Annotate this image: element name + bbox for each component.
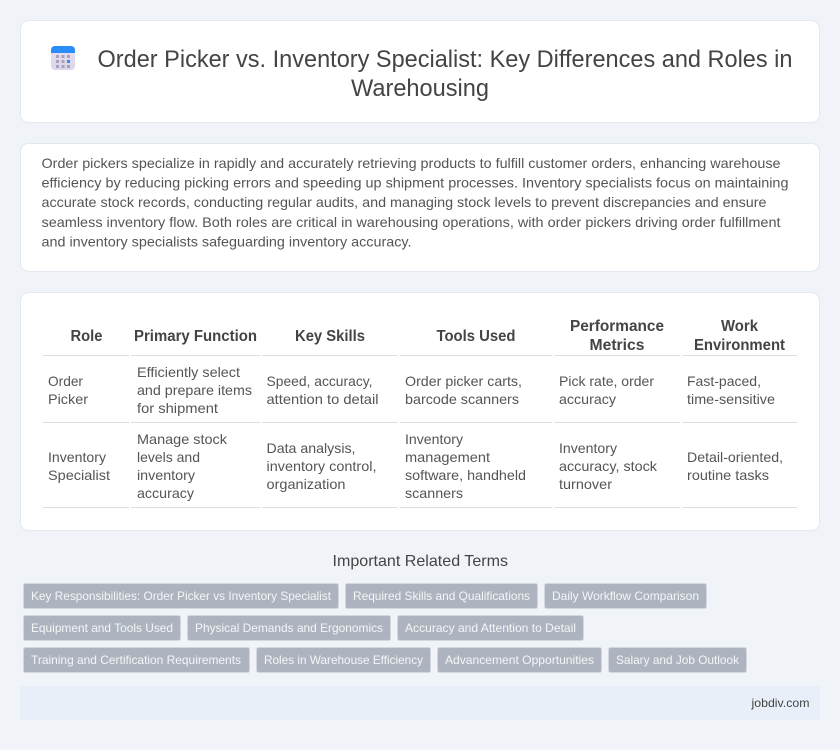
table row: order picker: and prepare items <box>137 382 252 398</box>
tag: Roles in Warehouse Efficiency <box>264 653 423 667</box>
table header row: Environment <box>694 337 786 354</box>
text block: role summary: Order pickers specialize in rapidly and accurately retrieving products to fulfill customer orders, enhancing warehouse <box>42 155 781 171</box>
table row: inventory specialist: Detail-oriented, <box>687 449 783 465</box>
panel: introduction text <box>20 144 820 272</box>
table row: inventory specialist: organization <box>266 476 346 492</box>
table row: inventory specialist: levels and <box>137 449 200 465</box>
table row: inventory specialist: inventory <box>137 467 195 483</box>
table row: inventory specialist: Data analysis, <box>266 440 356 456</box>
tag <box>24 616 180 640</box>
table row: order picker: time-sensitive <box>687 391 775 407</box>
table row: inventory specialist: Manage stock <box>137 431 228 447</box>
tag <box>346 584 538 608</box>
tag <box>398 616 584 640</box>
table row: order picker <box>48 364 775 416</box>
table row: inventory specialist: scanners <box>405 485 463 501</box>
table row: inventory specialist: management <box>405 449 490 465</box>
tag <box>188 616 390 640</box>
table header row: Tools Used <box>436 328 516 345</box>
tag <box>24 584 338 608</box>
tag: Required Skills and Qualifications <box>353 589 530 603</box>
table row: inventory specialist: Inventory <box>559 440 617 456</box>
table row: inventory specialist: Inventory <box>48 449 106 465</box>
table header row: Role <box>70 328 103 345</box>
title <box>98 46 792 102</box>
table header row <box>70 318 786 354</box>
table header row: Primary Function <box>134 328 257 345</box>
table row: inventory specialist: Specialist <box>48 467 110 483</box>
text block: role summary <box>42 155 788 249</box>
tag list: related terms <box>24 584 746 672</box>
tag: Training and Certification Requirements <box>31 653 241 667</box>
table row: order picker: Pick rate, order <box>559 373 654 389</box>
table row: inventory specialist: software, handheld <box>405 467 526 483</box>
tag <box>544 584 706 608</box>
text block: role summary: efficiency by reducing picking errors and speeding up shipment processes. Inventory specialists focus on maintaining <box>42 175 788 191</box>
footer: jobdiv.com <box>750 696 810 710</box>
title: Order Picker vs. Inventory Specialist: Key Differences and Roles in <box>98 46 792 73</box>
table row: inventory specialist: inventory control, <box>266 458 376 474</box>
table row: inventory specialist: accuracy <box>137 485 194 501</box>
tag <box>438 648 602 672</box>
tag: Daily Workflow Comparison <box>552 589 699 603</box>
footer <box>20 686 820 720</box>
text block: role summary: and inventory specialists safeguarding inventory accuracy. <box>42 233 412 249</box>
icon: calendar <box>51 46 75 70</box>
table row: inventory specialist: Inventory <box>405 431 463 447</box>
panel: title card <box>20 20 820 122</box>
table row: order picker: attention to detail <box>266 391 378 407</box>
table row: order picker: Fast-paced, <box>687 373 761 389</box>
tag: Physical Demands and Ergonomics <box>195 621 383 635</box>
table row: order picker: Order <box>48 373 83 389</box>
table row: inventory specialist: routine tasks <box>687 467 769 483</box>
title: Warehousing <box>351 75 489 102</box>
text block: role summary: seamless inventory flow. Both roles are critical in warehousing operations, with order pickers driving order fulfillment <box>42 214 781 230</box>
tag: Accuracy and Attention to Detail <box>405 621 576 635</box>
table row: order picker: accuracy <box>559 391 616 407</box>
heading: important related terms: Important Related Terms <box>332 553 508 570</box>
table header row: Metrics <box>590 337 645 354</box>
table row: inventory specialist: turnover <box>559 476 612 492</box>
table header row: Performance <box>570 318 664 335</box>
table row: order picker: Order picker carts, <box>405 373 522 389</box>
table row: order picker: Efficiently select <box>137 364 240 380</box>
panel: comparison table <box>20 292 820 530</box>
table header row: Key Skills <box>295 328 365 345</box>
tag: Equipment and Tools Used <box>31 621 173 635</box>
tag: Advancement Opportunities <box>445 653 594 667</box>
table row: inventory specialist: accuracy, stock <box>559 458 658 474</box>
tag <box>24 648 250 672</box>
text block: role summary: accurate stock records, conducting regular audits, and managing stock levels to prevent discrepancies and ensure <box>42 194 767 210</box>
tag <box>256 648 430 672</box>
table row: order picker: barcode scanners <box>405 391 519 407</box>
table row: order picker: for shipment <box>137 400 218 416</box>
tag <box>608 648 746 672</box>
table row: order picker: Speed, accuracy, <box>266 373 372 389</box>
tag: Salary and Job Outlook <box>616 653 740 667</box>
table header row: Work <box>721 318 758 335</box>
table row: inventory specialist <box>48 431 783 501</box>
table row: order picker: Picker <box>48 391 88 407</box>
tag: Key Responsibilities: Order Picker vs Inventory Specialist <box>31 589 332 603</box>
